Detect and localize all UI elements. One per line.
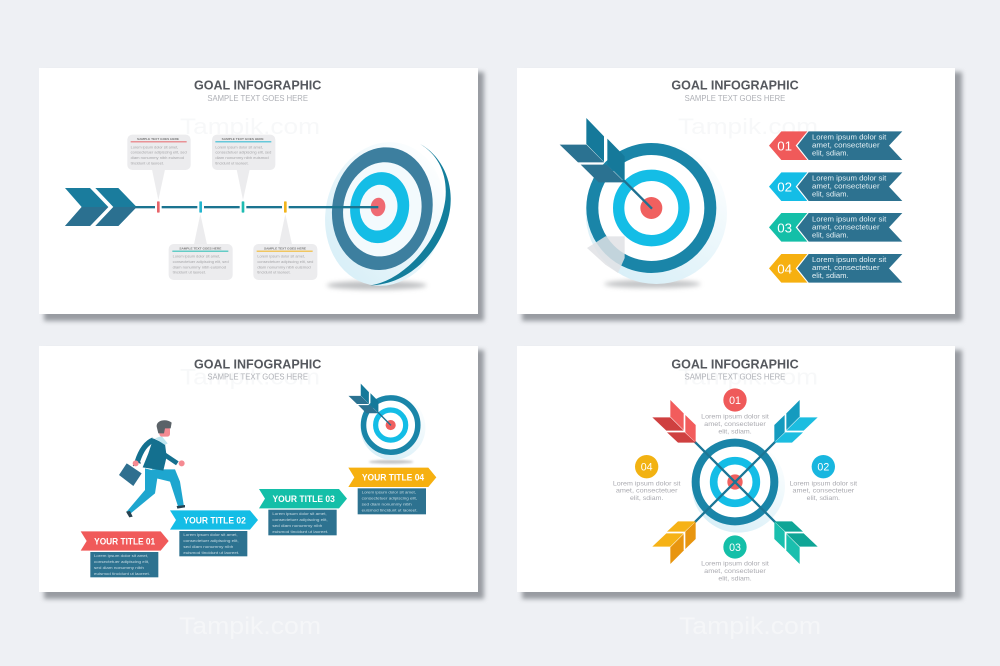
item 02: amet, consectetuer (792, 488, 855, 495)
callout: top centre: consectetuer adipiscing elit, sed (215, 151, 271, 155)
item 03: amet, consectetuer (704, 568, 767, 575)
ribbon 03: Lorem ipsum dolor sit (812, 215, 886, 223)
ribbon 02: elit, sdiam. (812, 191, 849, 199)
timeline marker: yellow (283, 200, 288, 214)
title: GOAL INFOGRAPHIC (194, 357, 321, 371)
timeline marker: teal (241, 200, 245, 214)
arrow fletching: blue (774, 400, 818, 443)
watermark text: Tampik.com (179, 613, 321, 640)
ribbon 03 (769, 213, 902, 242)
small target (348, 384, 425, 464)
step 4: consectetuer adipiscing elit, (362, 497, 417, 501)
ribbon 04: Lorem ipsum dolor sit (812, 256, 886, 264)
step 1: euismod tincidunt ut laoreet. (94, 572, 150, 576)
callout: bottom right: tincidunt ut laoreet. (257, 271, 291, 275)
panel: four arrows (517, 346, 962, 599)
ribbon 02: 02 (777, 180, 792, 195)
title: GOAL INFOGRAPHIC (671, 357, 799, 371)
callout: bottom centre: tincidunt ut laoreet. (173, 271, 206, 275)
ribbon 03: 03 (777, 220, 792, 235)
item 01: elit, sdiam. (718, 428, 752, 435)
callout: top left: consectetuer adipiscing elit, sed (131, 151, 187, 155)
callout: top left: Lorem ipsum dolor sit amet, (131, 145, 178, 149)
subtitle: SAMPLE TEXT GOES HERE (685, 93, 786, 103)
watermark text: Tampik.com (679, 613, 821, 640)
ribbon 01: amet, consectetuer (812, 142, 880, 150)
watermark: Tampik.com (180, 114, 320, 139)
item 01 (701, 388, 769, 435)
callout: top left: diam nonummy nibh euismod (131, 156, 184, 160)
central target (692, 439, 785, 533)
arrow fletching: red (652, 400, 696, 443)
callout: top centre: tincidunt ut laoreet. (215, 161, 249, 165)
callout: bottom centre: SAMPLE TEXT GOES HERE (179, 246, 221, 250)
item 03: 03 (729, 542, 741, 554)
step 3: YOUR TITLE 03 (272, 494, 335, 504)
ribbon 01: 01 (777, 139, 792, 154)
step 2: sed diam nonummy nibh (183, 545, 233, 549)
item 03: elit, sdiam. (718, 575, 752, 582)
subtitle: SAMPLE TEXT GOES HERE (207, 372, 308, 382)
step 3 (259, 489, 347, 535)
timeline marker: cyan (198, 200, 203, 214)
item 03: Lorem ipsum dolor sit (701, 561, 769, 568)
arrow fletching: teal (774, 521, 818, 564)
step 1: sed diam nonummy nibh (94, 566, 144, 570)
title: GOAL INFOGRAPHIC (671, 79, 799, 93)
callout: top left (127, 135, 191, 200)
step 4: Lorem ipsum dolor sit amet, (362, 491, 416, 495)
callout: bottom centre: diam nonummy nibh euismod (173, 265, 226, 269)
step 2: YOUR TITLE 02 (183, 515, 246, 525)
step 4: YOUR TITLE 04 (362, 473, 425, 483)
target with arrow (560, 118, 727, 288)
ribbon 02: Lorem ipsum dolor sit (812, 175, 886, 183)
ribbon 02 (769, 172, 902, 201)
item 02: 02 (817, 462, 829, 474)
callout: top left: SAMPLE TEXT GOES HERE (137, 137, 179, 141)
callout: top centre: SAMPLE TEXT GOES HERE (222, 137, 264, 141)
panel: target and numbered ribbons (517, 68, 962, 321)
step 3: euismod tincidunt ut laoreet. (272, 530, 328, 534)
step 2: consectetuer adipiscing elit, (183, 539, 239, 543)
callout: top centre: Lorem ipsum dolor sit amet, (215, 145, 263, 149)
item 01: Lorem ipsum dolor sit (701, 414, 769, 421)
step 4: sed diam nonummy nibh (362, 503, 412, 507)
step 3: consectetuer adipiscing elit, (272, 518, 328, 522)
timeline marker: red (156, 200, 161, 214)
subtitle: SAMPLE TEXT GOES HERE (207, 93, 308, 103)
item 04: 04 (641, 462, 653, 474)
item 04: Lorem ipsum dolor sit (613, 480, 681, 487)
item 02: Lorem ipsum dolor sit (789, 480, 857, 487)
callout: bottom right: diam nonummy nibh euismod (257, 265, 311, 269)
item 04: elit, sdiam. (630, 495, 663, 502)
step 2: euismod tincidunt ut laoreet. (183, 551, 239, 555)
callout: bottom right: consectetuer adipiscing elit, sed (257, 260, 313, 264)
ribbon 04: 04 (777, 261, 793, 276)
ribbon 03: elit, sdiam. (812, 231, 849, 239)
step 4 (348, 468, 436, 514)
callout: bottom right: SAMPLE TEXT GOES HERE (264, 246, 306, 250)
item 03 (701, 535, 769, 582)
step 2 (170, 510, 258, 556)
ribbon 03: amet, consectetuer (812, 223, 880, 231)
callout: bottom right: Lorem ipsum dolor sit amet, (257, 255, 305, 259)
step 1 (81, 531, 169, 577)
callout: top left: tincidunt ut laoreet. (131, 161, 164, 165)
step 1: Lorem ipsum dolor sit amet, (94, 554, 148, 558)
item 02 (789, 455, 857, 502)
target board (312, 131, 458, 297)
item 01: 01 (729, 395, 741, 407)
title: GOAL INFOGRAPHIC (194, 79, 321, 93)
ribbon 04 (769, 254, 902, 283)
arrow (65, 188, 378, 226)
subtitle: SAMPLE TEXT GOES HERE (685, 372, 786, 382)
ribbon 01: elit, sdiam. (812, 150, 849, 158)
item 04 (613, 455, 681, 502)
ribbon 01 (769, 131, 902, 160)
ribbon 02: amet, consectetuer (812, 183, 880, 191)
callout: bottom centre (169, 214, 233, 280)
callout: bottom centre: Lorem ipsum dolor sit amet, (173, 255, 220, 259)
callout: top centre (212, 135, 275, 200)
step 4: euismod tincidunt ut laoreet. (362, 509, 418, 513)
callout: bottom right (253, 214, 317, 280)
watermark: Tampik.com (180, 364, 320, 389)
step 1: consectetuer adipiscing elit, (94, 560, 149, 564)
step 3: Lorem ipsum dolor sit amet, (272, 512, 327, 516)
ribbon 04: elit, sdiam. (812, 272, 849, 280)
step 3: sed diam nonummy nibh (272, 524, 322, 528)
item 04: amet, consectetuer (616, 488, 678, 495)
watermark: Tampik.com (678, 364, 818, 389)
ribbon 04: amet, consectetuer (812, 264, 880, 272)
item 01: amet, consectetuer (704, 421, 767, 428)
panel: arrow timeline (39, 68, 484, 321)
callout: top centre: diam nonummy nibh euismod (215, 156, 269, 160)
arrow fletching: yellow (652, 521, 696, 564)
watermark text (179, 613, 821, 640)
running businessman (119, 420, 185, 517)
callout: bottom centre: consectetuer adipiscing elit, sed (173, 260, 229, 264)
panel: steps to goal (39, 346, 484, 599)
watermark: Tampik.com (678, 114, 818, 139)
ribbon 01: Lorem ipsum dolor sit (812, 134, 886, 142)
step 1: YOUR TITLE 01 (94, 536, 155, 546)
item 02: elit, sdiam. (807, 495, 840, 502)
step 2: Lorem ipsum dolor sit amet, (183, 533, 238, 537)
